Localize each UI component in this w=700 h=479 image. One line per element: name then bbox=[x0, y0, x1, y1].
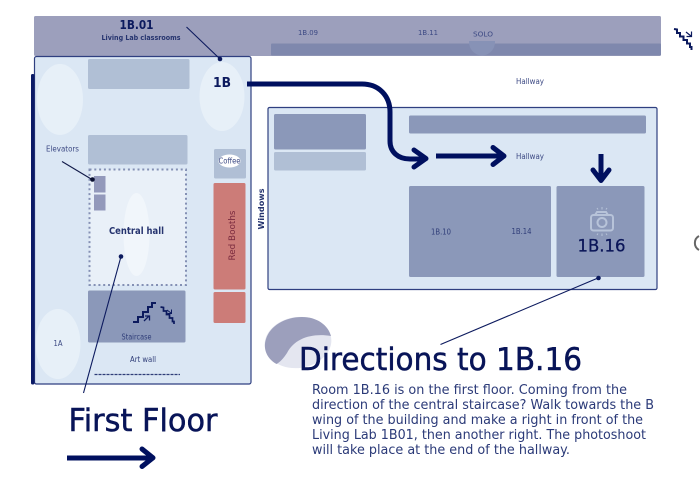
edge mark right bbox=[695, 236, 699, 250]
label: Hallway above panel: Hallway bbox=[516, 77, 545, 86]
panel: B wing hallway: Hallway bbox=[516, 152, 545, 161]
red booths: Red Booths bbox=[228, 210, 238, 260]
label: Elevators: Elevators bbox=[46, 144, 79, 154]
central hall bbox=[90, 170, 186, 285]
label: 1B.01 Living Lab classrooms: Living Lab classrooms bbox=[102, 33, 180, 42]
panel: first floor plan bbox=[31, 56, 251, 384]
top wing bar: 1B.09 bbox=[298, 29, 318, 37]
label: Windows: Windows bbox=[257, 188, 266, 230]
top wing bar: SOLO bbox=[473, 30, 494, 38]
coffee bbox=[214, 149, 246, 178]
leader: Elevators bbox=[62, 162, 95, 182]
decorative blob behind heading bbox=[261, 313, 335, 372]
text block: directions: Living Lab 1B01, then another right. The photoshoot bbox=[312, 428, 646, 443]
arrow: along hallway bbox=[436, 148, 504, 164]
label: 1B: 1B bbox=[213, 75, 231, 91]
text block: directions: will take place at the end of the hallway. bbox=[312, 443, 570, 458]
room 1B.10 / 1B.14 bbox=[409, 186, 551, 277]
text block: directions bbox=[312, 383, 654, 458]
heading: Directions to 1B.16: Directions to 1B.16 bbox=[299, 342, 582, 378]
icon: camera bbox=[591, 207, 613, 236]
art wall: Art wall bbox=[130, 355, 156, 364]
room 1B.10 / 1B.14: 1B.10 bbox=[431, 228, 451, 236]
top wing bar: 1B.11 bbox=[418, 29, 438, 37]
panel: B wing hallway bbox=[268, 108, 657, 290]
text block: directions: direction of the central staircase? Walk towards the B bbox=[312, 398, 654, 413]
staircase bbox=[88, 290, 186, 342]
arrow: first floor bbox=[67, 449, 153, 466]
room 1B.16 bbox=[556, 186, 644, 277]
leader: First Floor to central hall bbox=[84, 254, 123, 393]
leader: Directions to 1B.16 bbox=[440, 276, 601, 344]
room 1B.10 / 1B.14: 1B.14 bbox=[512, 227, 532, 236]
arrow: down to room bbox=[593, 154, 609, 180]
arrow: route from 1B to hallway bbox=[247, 84, 426, 167]
text block: directions: wing of the building and make a right in front of the bbox=[312, 413, 643, 428]
art wall bbox=[94, 355, 180, 374]
red booths bbox=[214, 183, 246, 323]
staircase: Staircase bbox=[122, 332, 152, 342]
room 1B.16: 1B.16 bbox=[578, 236, 626, 256]
leader: 1B.01 to 1B bbox=[186, 27, 222, 61]
central hall: Central hall bbox=[109, 226, 164, 237]
coffee: Coffee bbox=[218, 156, 241, 166]
text block: directions: Room 1B.16 is on the first floor. Coming from the bbox=[312, 383, 627, 398]
heading: First Floor: First Floor bbox=[68, 403, 218, 439]
label: 1B.01 Living Lab classrooms: 1B.01 bbox=[120, 18, 154, 32]
top wing bar bbox=[34, 16, 661, 56]
icon: stairs top right bbox=[674, 29, 692, 50]
label: 1A: 1A bbox=[54, 339, 63, 348]
label: 1B.01 Living Lab classrooms bbox=[102, 18, 180, 42]
